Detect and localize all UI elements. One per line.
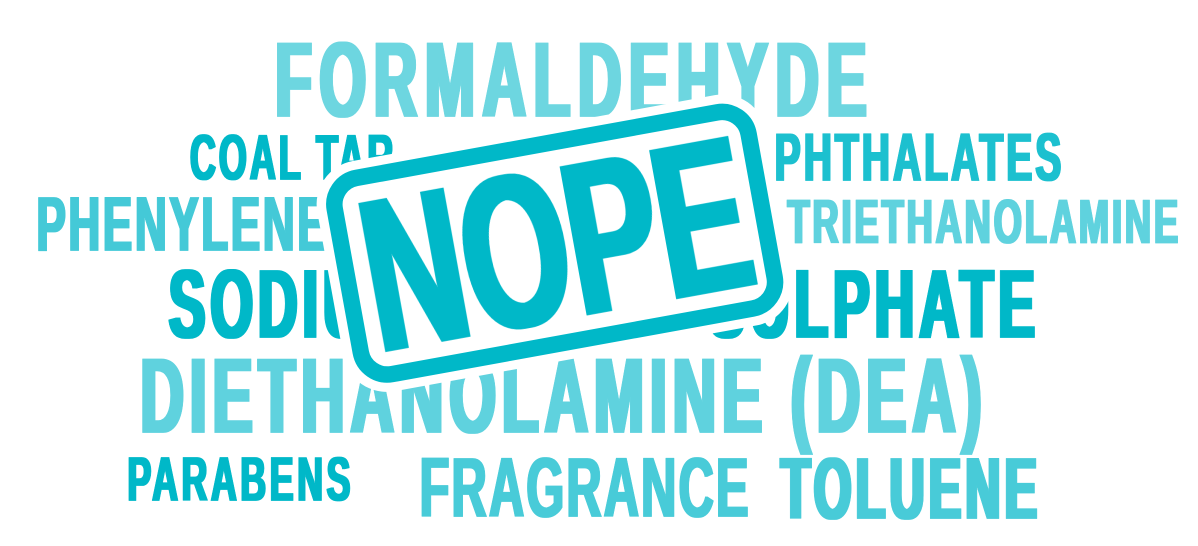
word: phthalates: PHTHALATES — [775, 119, 1061, 195]
stamp word: NOPE — [344, 89, 768, 399]
word: phenylene: PHENYLENE — [36, 182, 327, 268]
word: fragrance: FRAGRANCE — [420, 441, 748, 535]
word: toluene: TOLUENE — [781, 439, 1037, 537]
stamp border — [330, 108, 779, 379]
word: parabens: PARABENS — [128, 444, 350, 514]
stamp: nope — [309, 83, 801, 405]
word: formaldehyde: FORMALDEHYDE — [275, 21, 867, 140]
word: sodium lauryl sulphate: SODIUM LAURYL SULPHATE — [169, 250, 1035, 358]
word: triethanolamine: TRIETHANOLAMINE — [788, 187, 1178, 256]
word: coal tar: COAL TAR — [190, 122, 393, 193]
word: diethanolamine (dea): DIETHANOLAMINE (DEA) — [140, 337, 982, 456]
